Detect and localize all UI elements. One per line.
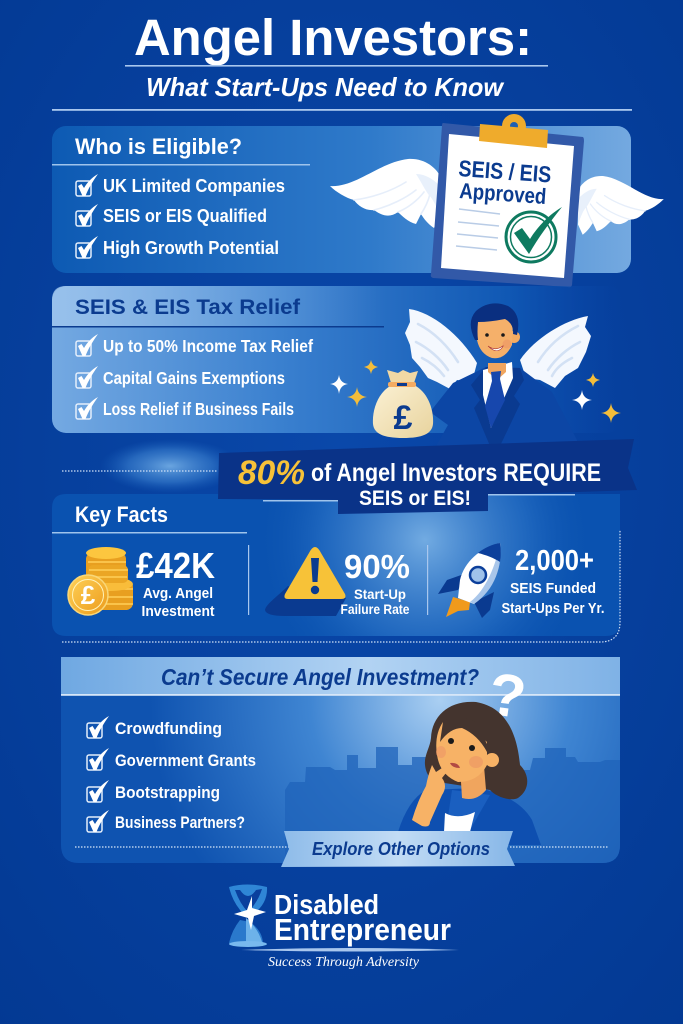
wing: left xyxy=(405,309,477,389)
icon: gold coins: £ xyxy=(81,580,96,610)
checklist: alternatives: Crowdfunding xyxy=(115,719,222,738)
wing: right xyxy=(520,316,591,388)
banner: 80% require SEIS or EIS xyxy=(218,439,637,514)
stat: SEIS funded start-ups: 2,000+ xyxy=(515,545,594,577)
illustration: thinking woman xyxy=(398,702,541,845)
icon: winged clipboard xyxy=(330,114,664,287)
ribbon: explore other options: Explore Other Options xyxy=(312,839,490,859)
stat: average investment xyxy=(136,545,215,620)
checklist: eligibility: SEIS or EIS Qualified xyxy=(103,206,267,226)
checklist: alternatives: Business Partners? xyxy=(115,813,245,832)
checklist: eligibility: UK Limited Companies xyxy=(103,176,285,196)
heading: key facts: Key Facts xyxy=(75,502,168,527)
illustration: angel investor with money bag xyxy=(330,303,621,446)
panel: who is eligible xyxy=(52,126,631,273)
tagline: Success Through Adversity xyxy=(268,954,419,969)
heading: tax relief: SEIS & EIS Tax Relief xyxy=(75,296,301,319)
stat: failure rate: 90% xyxy=(344,548,410,585)
city skyline xyxy=(285,747,620,863)
checklist: eligibility: High Growth Potential xyxy=(103,238,279,258)
banner: 80% require SEIS or EIS: SEIS or EIS! xyxy=(359,487,471,510)
checklist: eligibility xyxy=(76,174,285,258)
stat: failure rate: Start-Up xyxy=(354,586,406,602)
title xyxy=(125,9,548,102)
icon: warning triangle xyxy=(265,547,346,616)
checklist: tax relief: Up to 50% Income Tax Relief xyxy=(103,336,313,356)
checklist: tax relief xyxy=(76,334,313,419)
subtitle: What Start-Ups Need to Know xyxy=(146,72,505,102)
banner: 80% require SEIS or EIS: 80% xyxy=(238,454,305,492)
panel: can't secure angel investment xyxy=(61,657,620,867)
icon: winged clipboard: Approved xyxy=(459,178,547,209)
icon: money bag xyxy=(373,370,433,438)
heading: who is eligible: Who is Eligible? xyxy=(75,134,242,159)
icon: rocket xyxy=(438,543,501,618)
stat: SEIS funded start-ups xyxy=(502,545,604,617)
icon: money bag: £ xyxy=(394,399,413,437)
banner: 80% require SEIS or EIS: of Angel Investors REQUIRE xyxy=(311,459,601,487)
checklist: alternatives: Bootstrapping xyxy=(115,783,220,802)
stat: average investment: Investment xyxy=(142,603,214,620)
heading: can't secure: Can’t Secure Angel Investment? xyxy=(161,664,479,690)
checklist: tax relief: Loss Relief if Business Fails xyxy=(103,399,294,419)
panel: key facts xyxy=(52,494,620,636)
checklist: alternatives xyxy=(87,716,256,832)
icon: gold coins xyxy=(68,547,133,615)
sparkles xyxy=(330,360,621,423)
panel: tax relief xyxy=(52,286,622,433)
checklist: tax relief: Capital Gains Exemptions xyxy=(103,368,285,388)
icon: winged clipboard: SEIS / EIS xyxy=(458,155,552,187)
stat: failure rate xyxy=(340,548,410,617)
stat: average investment: Avg. Angel xyxy=(143,585,213,602)
glow strip xyxy=(100,439,240,493)
logo: disabled entrepreneur xyxy=(229,884,459,969)
stat: SEIS funded start-ups: Start-Ups Per Yr. xyxy=(502,600,604,617)
logo: disabled entrepreneur: Entrepreneur xyxy=(274,912,451,947)
stat: average investment: £42K xyxy=(136,545,215,586)
checklist: alternatives: Government Grants xyxy=(115,751,256,770)
stat: failure rate: Failure Rate xyxy=(340,601,410,617)
title: Angel Investors: xyxy=(134,9,532,66)
ribbon: explore other options xyxy=(281,831,515,867)
icon: question mark: ? xyxy=(484,660,530,731)
stat: SEIS funded start-ups: SEIS Funded xyxy=(510,580,596,597)
wordmark: Disabled xyxy=(274,889,379,920)
icon: hourglass xyxy=(229,884,267,947)
